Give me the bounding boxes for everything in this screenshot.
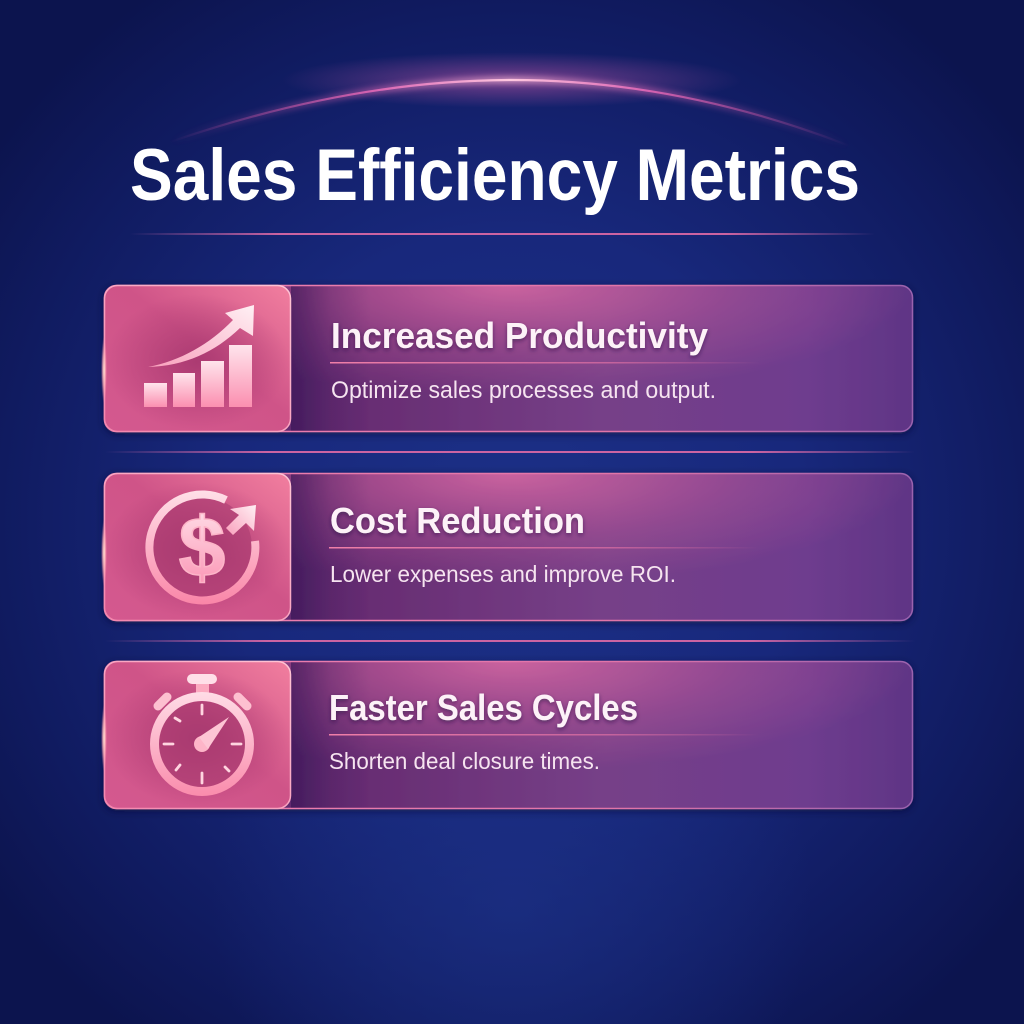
divider <box>329 547 759 548</box>
description: Lower expenses and improve ROI. <box>330 561 676 587</box>
card background <box>104 662 912 808</box>
heading: Increased Productivity <box>331 315 708 356</box>
card background <box>104 286 912 432</box>
card background <box>104 474 912 620</box>
icon: stopwatch <box>154 674 250 792</box>
panel: faster sales cycles <box>101 662 912 808</box>
icon tile <box>101 474 290 620</box>
title: Sales Efficiency Metrics <box>130 135 860 216</box>
heading: Cost Reduction <box>330 500 585 541</box>
heading: Faster Sales Cycles <box>329 687 638 728</box>
description: Optimize sales processes and output. <box>331 377 716 404</box>
panel: increased productivity <box>101 286 912 432</box>
icon tile <box>101 286 290 432</box>
title rule <box>130 233 875 235</box>
separator 2 <box>105 640 915 642</box>
decorative glowing arc <box>170 52 850 146</box>
divider <box>329 734 759 736</box>
icon: bar chart with rising arrow <box>144 305 254 407</box>
panel: cost reduction <box>101 474 912 620</box>
icon tile <box>101 662 290 808</box>
divider <box>330 362 760 364</box>
description: Shorten deal closure times. <box>329 748 600 774</box>
icon: dollar sign with circular arrow: $ <box>179 500 225 594</box>
separator 1 <box>105 451 915 453</box>
icon: dollar sign with circular arrow <box>149 494 256 600</box>
